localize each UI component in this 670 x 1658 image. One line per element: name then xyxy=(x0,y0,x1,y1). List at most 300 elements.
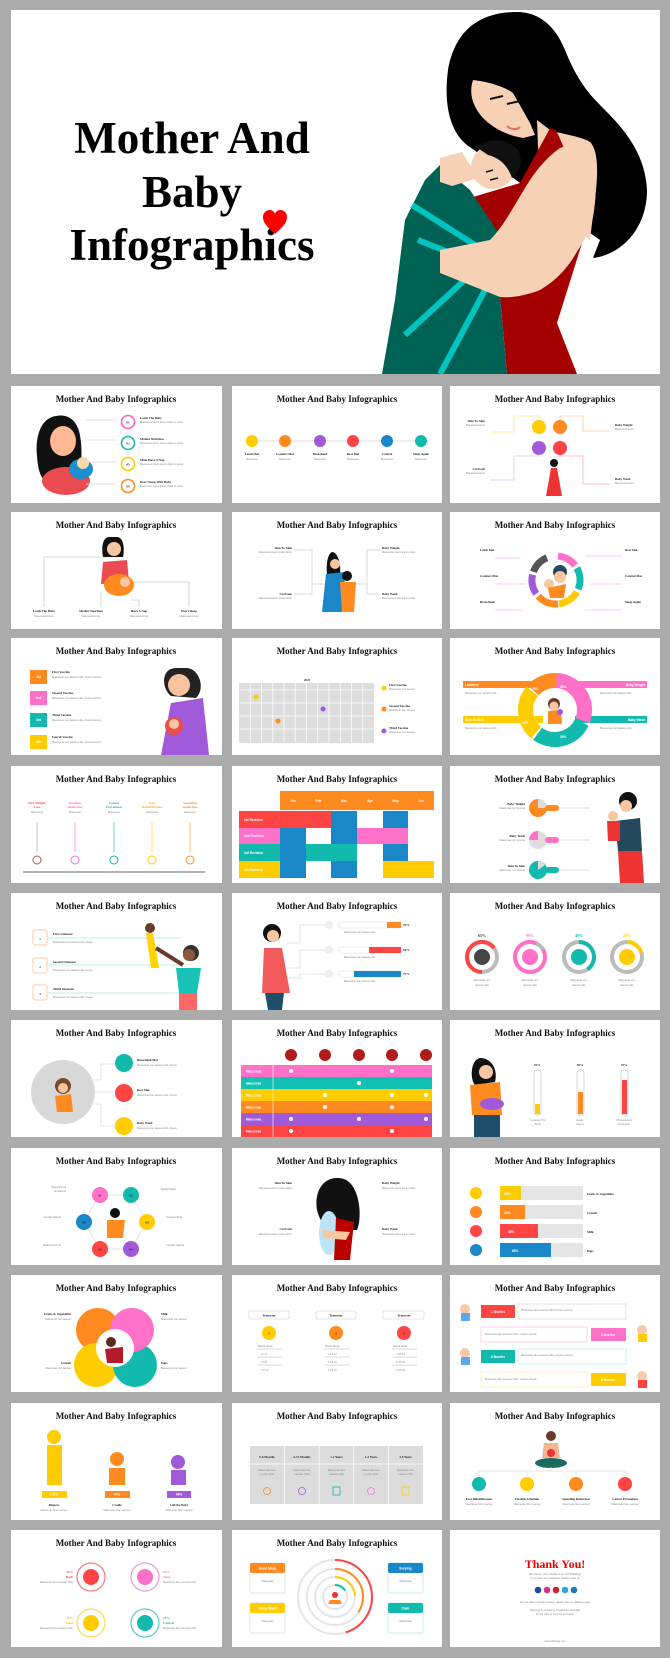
panel: slide 15 ring charts: Maecenas non xyxy=(473,978,491,982)
list blocks xyxy=(30,670,102,749)
panel: slide 28 ring icons: Maecenas Non Laoreet Odio xyxy=(40,1626,74,1630)
bars: Maecenas non laoreet odio. xyxy=(600,691,632,695)
thermometers: Increase The xyxy=(530,1118,546,1122)
list blocks: Maecenas non laoreet odio. Fusce lobortis xyxy=(52,718,102,722)
gantt chart: 2nd Revision xyxy=(244,834,264,838)
column titles: Bonding xyxy=(69,801,81,805)
panel: slide 16 circle with branches xyxy=(11,1020,222,1137)
center icon xyxy=(328,1592,342,1604)
bars: 75% xyxy=(403,972,409,976)
columns: 100% xyxy=(50,1492,58,1496)
gantt chart: Mar xyxy=(341,799,348,803)
side boxes: Maecenas xyxy=(262,1579,274,1583)
side boxes: Good Sleep xyxy=(259,1566,276,1570)
labels: Maecenas non laoreet xyxy=(45,1317,71,1321)
labels: Sleep xyxy=(163,1575,171,1579)
labels: Skin To Skin xyxy=(275,546,292,550)
side boxes: Calm xyxy=(402,1606,410,1610)
column titles: Reduction xyxy=(68,805,83,809)
gantt chart: Jun xyxy=(418,799,424,803)
panel: slide 10 five columns: Maecenas xyxy=(108,810,121,814)
labels: Maecenas lorem ipsum dolor xyxy=(382,1186,415,1190)
gantt chart xyxy=(239,791,434,878)
bars: Maecenas non laoreet odio xyxy=(344,930,376,934)
heading: Mother And Baby Infographics xyxy=(495,1156,616,1166)
timeline circles: Control xyxy=(382,452,392,456)
labels: Maecenas lorem xyxy=(179,614,199,618)
pie items: Baby Weight xyxy=(507,802,526,806)
labels: Cut back xyxy=(280,1227,292,1231)
illustration: woman lifting baby xyxy=(145,923,201,1010)
columns: 2 xyxy=(335,1332,337,1336)
timeline circles: Maecenas xyxy=(279,457,292,461)
numbered list: First trimester xyxy=(53,932,73,936)
connectors xyxy=(44,557,189,607)
bars: Baby Wash xyxy=(628,718,645,722)
table: 0-6 Months xyxy=(259,1455,276,1459)
panel: slide 30 thank you xyxy=(450,1530,660,1647)
labels: Mother Nutrition xyxy=(79,609,103,613)
list items: Don't Sleep With Baby xyxy=(140,480,172,484)
panel: slide 21 horizontal bars xyxy=(450,1148,660,1265)
labels xyxy=(44,1312,187,1370)
heading: thank you: Thank You! xyxy=(525,1557,585,1571)
thermometers: Easily xyxy=(577,1118,584,1122)
stripes: Maecenas xyxy=(246,1070,261,1074)
text block: www.slideegg.com xyxy=(544,1639,566,1643)
labels: Paps xyxy=(161,1361,168,1365)
columns: Trimester xyxy=(329,1314,343,1318)
legend: Second Vaccine xyxy=(389,704,411,708)
numbered list: 2 xyxy=(39,965,41,969)
column titles: Reduction xyxy=(183,805,198,809)
panel: slide 16 circle with branches: Rest Mat xyxy=(137,1088,150,1092)
columns: Maecenas Non Laoreet xyxy=(166,1508,193,1512)
illustration: seated mother xyxy=(535,1431,567,1468)
panel: slide 15 ring charts: Maecenas non xyxy=(570,978,588,982)
labels: Baby Wash xyxy=(382,592,398,596)
panel: slide 15 ring charts: 65% xyxy=(478,933,486,938)
hexagon ring: 04 xyxy=(129,1248,133,1252)
labels: Sleep Again xyxy=(625,600,641,604)
column titles xyxy=(28,801,198,809)
connectors and circles xyxy=(490,416,610,484)
labels: Latch Mat xyxy=(480,548,495,552)
labels xyxy=(66,1570,174,1625)
columns: 45% xyxy=(114,1492,120,1496)
table: 1-2 Years xyxy=(330,1455,344,1459)
labels: Emotional xyxy=(54,1189,66,1193)
icons: social xyxy=(535,1587,577,1593)
heading: Mother And Baby Infographics xyxy=(495,774,616,784)
stripes: Maecenas xyxy=(246,1094,261,1098)
branches xyxy=(479,1467,626,1476)
list items: Maecenas lorem ipsum dolor sit amet xyxy=(140,420,183,424)
legend: Maecenas non laoreet xyxy=(389,687,415,691)
title: Baby xyxy=(142,167,243,217)
list items: 01 xyxy=(126,420,130,424)
panel: slide 15 ring charts: 40% xyxy=(575,933,583,938)
heading: Mother And Baby Infographics xyxy=(277,1538,398,1548)
panel: slide 15 ring charts: laoreet odio xyxy=(620,983,634,987)
panel: slide 24 babies with bars xyxy=(450,1275,660,1392)
panel: main title slide xyxy=(11,10,660,374)
illustration: woman holding baby xyxy=(470,1058,504,1137)
panel: slide 10 five columns: Maecenas xyxy=(146,810,159,814)
heading: Mother And Baby Infographics xyxy=(277,1156,398,1166)
columns: Month Week xyxy=(325,1344,340,1348)
list blocks: Fourth Vaccine xyxy=(52,735,73,739)
thermometers xyxy=(530,1063,632,1126)
list blocks: Maecenas non laoreet odio. Fusce lobortis xyxy=(52,740,102,744)
column titles: Fast xyxy=(149,801,156,805)
panel: slide 15 ring charts: 20% xyxy=(623,933,631,938)
timeline circles: Maecenas xyxy=(415,457,428,461)
labels: 75% xyxy=(163,1616,170,1620)
panel: slide 9 donut with bars xyxy=(450,638,660,755)
panel: slide 7 list with woman xyxy=(11,638,222,755)
bars: Maecenas non laoreet odio. xyxy=(600,726,632,730)
panel: slide 10 five columns: Maecenas xyxy=(31,810,44,814)
table: Maecenas Non xyxy=(362,1468,380,1472)
illustration: mother and child xyxy=(548,698,563,724)
hexagon ring: 01 xyxy=(98,1194,102,1198)
bar chart: 65% xyxy=(512,1249,519,1253)
columns: 8 32-35 xyxy=(396,1360,405,1364)
list blocks: Maecenas non laoreet odio. Fusce lobortis xyxy=(52,696,102,700)
ring chart xyxy=(523,547,589,613)
panel: slide 16 circle with branches: Baby Wash xyxy=(137,1121,153,1125)
labels: Maecenas lorem ipsum dolor xyxy=(382,1232,415,1236)
illustration: woman in purple with baby xyxy=(161,668,209,755)
panel: slide 28 ring icons: Maecenas Non Laoreet Odio xyxy=(163,1626,197,1630)
list items: Maecenas lorem ipsum dolor sit amet xyxy=(140,484,183,488)
heading: Mother And Baby Infographics xyxy=(277,774,398,784)
labels: Easily Digest xyxy=(161,1187,176,1191)
list blocks: 4th xyxy=(36,740,41,744)
panel: slide 9 donut with bars: 30% xyxy=(560,735,567,739)
timeline circles: Comfort Mat xyxy=(276,452,295,456)
thermometers: 25% xyxy=(534,1063,540,1067)
bar chart: Paps xyxy=(587,1249,594,1253)
venn petals xyxy=(74,1308,157,1387)
list items xyxy=(86,416,183,492)
labels: Maecenas lorem xyxy=(81,614,101,618)
heading: Mother And Baby Infographics xyxy=(495,646,616,656)
labels: Maecenas lorem ipsum dolor xyxy=(259,596,292,600)
illustrations: babies xyxy=(460,1304,647,1388)
side boxes: Maecenas xyxy=(400,1619,412,1623)
heading: Mother And Baby Infographics xyxy=(56,1156,177,1166)
columns: Lull the Baby xyxy=(170,1503,189,1507)
hexagon ring: 03 xyxy=(145,1220,149,1224)
gantt chart: Feb xyxy=(316,799,321,803)
heading: Mother And Baby Infographics xyxy=(56,1538,177,1548)
labels: Control xyxy=(163,1621,174,1625)
panel: slide 6 ring xyxy=(450,512,660,629)
labels: Contain Natural xyxy=(43,1215,61,1219)
thermometers: Digest xyxy=(576,1122,584,1126)
bars: Skin To Skin xyxy=(465,718,484,722)
text block: Slideegg is created by PowerPoint template xyxy=(530,1608,581,1612)
panel: slide 28 ring icons xyxy=(11,1530,222,1647)
pie items: Baby Wash xyxy=(510,834,525,838)
panel: slide 9 donut with bars: 25% xyxy=(522,721,529,725)
panel: slide 20 hug with labels xyxy=(232,1148,442,1265)
table: Laoreet Odio xyxy=(260,1472,275,1476)
side boxes: Maecenas xyxy=(262,1619,274,1623)
column titles: Spending xyxy=(183,801,197,805)
gantt chart: May xyxy=(392,799,399,803)
bar chart: Cereals xyxy=(587,1211,598,1215)
panel: slide 15 ring charts: laoreet odio xyxy=(523,983,537,987)
table xyxy=(250,1446,423,1504)
columns xyxy=(41,1430,193,1512)
panel: slide 2 timeline xyxy=(232,386,442,503)
illustration: pregnant woman xyxy=(262,924,290,1010)
panel: slide 27 tree with woman: Spending Reduction xyxy=(562,1497,590,1501)
heading: Mother And Baby Infographics xyxy=(277,1411,398,1421)
heading: Mother And Baby Infographics xyxy=(56,901,177,911)
panel: slide 1 numbered list xyxy=(11,386,222,503)
labels: Maecenas lorem ipsum dolor xyxy=(259,1186,292,1190)
list items: Mom Have A Nap xyxy=(140,458,165,462)
columns: 6 23-27 xyxy=(328,1368,337,1372)
list blocks: First Vaccine xyxy=(52,670,70,674)
labels: 45% xyxy=(66,1570,74,1574)
panel: slide 8 calendar xyxy=(232,638,442,755)
rows: Maecenas Non Laoreet Odio. Fusce Lobortis xyxy=(485,1332,537,1336)
bar chart xyxy=(470,1186,615,1257)
labels: Maecenas lorem xyxy=(34,614,54,618)
list items: Maecenas lorem ipsum dolor sit amet xyxy=(140,441,183,445)
timeline circles: Breastfeed xyxy=(313,452,327,456)
labels: Cereals xyxy=(61,1361,72,1365)
panel: slide 27 tree with woman: Flexible Schedule xyxy=(515,1497,539,1501)
labels: Maecenas lorem xyxy=(129,614,149,618)
heading: Mother And Baby Infographics xyxy=(277,646,398,656)
columns: 5 18-22 xyxy=(328,1360,337,1364)
panel: slide 16 circle with branches: Breastfeed Mat xyxy=(137,1058,159,1062)
rows xyxy=(481,1304,626,1387)
panel: slide 27 tree with woman xyxy=(450,1403,660,1520)
labels: Cut back xyxy=(280,592,292,596)
panel: slide 13 trimesters with woman xyxy=(11,893,222,1010)
columns: Month Week xyxy=(258,1344,273,1348)
heading: Mother And Baby Infographics xyxy=(495,1028,616,1038)
labels xyxy=(259,546,415,600)
panel: slide 26 age table xyxy=(232,1403,442,1520)
list blocks: 1st xyxy=(36,675,42,679)
calendar grid: 2025 xyxy=(304,678,311,682)
gantt chart: Apr xyxy=(367,799,373,803)
numbered list: Maecenas non laoreet odio. Fusce xyxy=(53,968,93,972)
labels: Increase Baby xyxy=(166,1215,183,1219)
panel: slide 28 ring icons: Maecenas Non Laoreet Odio xyxy=(163,1580,197,1584)
table: Laoreet Odio xyxy=(294,1472,310,1476)
panel: slide 5 woman with labels xyxy=(232,512,442,629)
columns: Diapers xyxy=(49,1503,60,1507)
bars: Maecenas non laoreet odio. xyxy=(465,726,497,730)
rows: 1 Months xyxy=(491,1310,505,1314)
list blocks: Second Vaccine xyxy=(52,691,74,695)
panel: slide 10 five columns: Maecenas xyxy=(69,810,82,814)
labels: 55% xyxy=(66,1616,74,1620)
side boxes: Burping xyxy=(399,1566,412,1570)
pie items: Maecenas non laoreet xyxy=(499,868,525,872)
panel: slide 27 tree with woman: Cancer Prevention xyxy=(612,1497,638,1501)
labels xyxy=(466,419,634,485)
heading: Mother And Baby Infographics xyxy=(56,1028,177,1038)
column titles: Cancer xyxy=(109,801,120,805)
thermometers: Physical And xyxy=(617,1118,632,1122)
panel: slide 27 tree with woman: Fast Rehabilitation xyxy=(466,1497,492,1501)
column titles: Fast Weight xyxy=(28,801,47,805)
labels: Rest Mat xyxy=(625,548,638,552)
labels: Control Mat xyxy=(625,574,643,578)
column titles: Loss xyxy=(34,805,41,809)
panel: slide 12 pies with woman xyxy=(450,766,660,883)
labels: Skin To Skin xyxy=(275,1181,292,1185)
table: 6-12 Months xyxy=(293,1455,311,1459)
side boxes: Sleep Mood xyxy=(259,1606,276,1610)
calendar grid xyxy=(239,678,374,743)
gantt chart: 4th Revision xyxy=(244,868,263,872)
labels: Baby Weight xyxy=(382,546,401,550)
hexagon ring xyxy=(76,1187,155,1257)
list blocks: Third Vaccine xyxy=(52,713,72,717)
columns: Maecenas Non Laoreet xyxy=(104,1508,131,1512)
legend xyxy=(382,683,415,734)
bars: Maecenas non laoreet odio xyxy=(344,955,376,959)
numbered list: Second trimester xyxy=(53,960,77,964)
rows: Maecenas Non Laoreet Odio. Fusce Lobortis xyxy=(485,1377,537,1381)
legend: First Vaccine xyxy=(389,683,407,687)
thermometers: Emotional xyxy=(618,1122,630,1126)
rings xyxy=(77,1563,159,1637)
columns: 1 0-4 xyxy=(261,1352,267,1356)
hexagon ring: 06 xyxy=(82,1220,86,1224)
panel: slide 17 striped table xyxy=(232,1020,442,1137)
table: Maecenas Non xyxy=(258,1468,276,1472)
labels: Maecenas lorem xyxy=(615,427,634,431)
columns: Maecenas Non Laoreet xyxy=(41,1508,68,1512)
panel: slide 18 thermometers xyxy=(450,1020,660,1137)
columns: 7 28-31 xyxy=(396,1352,405,1356)
title: Infographics xyxy=(69,220,315,270)
labels: Don't Sleep xyxy=(181,609,197,613)
baseline arrow xyxy=(23,871,205,873)
panel: slide 14 bars with woman xyxy=(232,893,442,1010)
table: 2-3 Years xyxy=(365,1455,378,1459)
columns: 4 14-17 xyxy=(328,1352,337,1356)
panel: slide 16 circle with branches: Maecenas non laoreet odio. Fusce xyxy=(137,1093,177,1097)
bar chart: Fruits & Vegetables xyxy=(587,1192,615,1196)
side boxes: Maecenas xyxy=(400,1579,412,1583)
panel: slide 27 tree with woman: Maecenas Non Laoreet xyxy=(612,1502,639,1506)
labels: Bath xyxy=(66,1575,73,1579)
panel: slide 27 tree with woman: Maecenas Non Laoreet xyxy=(563,1502,590,1506)
numbered list: 3 xyxy=(39,992,41,996)
stripes: Maecenas xyxy=(246,1130,261,1134)
title xyxy=(69,113,315,270)
labels xyxy=(259,1181,415,1236)
timeline circles xyxy=(245,435,429,461)
labels xyxy=(480,548,643,610)
labels: Physical And xyxy=(51,1185,67,1189)
labels: Cut back xyxy=(472,467,485,471)
header icons xyxy=(285,1049,432,1061)
legend: Third Vaccine xyxy=(389,726,409,730)
labels xyxy=(43,1185,184,1247)
labels: Maecenas lorem ipsum dolor xyxy=(259,1232,292,1236)
rows: 9 Months xyxy=(601,1378,615,1382)
columns: 40% xyxy=(176,1492,182,1496)
heading: Mother And Baby Infographics xyxy=(277,394,398,404)
numbered list: Maecenas non laoreet odio. Fusce xyxy=(53,940,93,944)
illustration: woman in blue with child xyxy=(322,552,356,612)
panel: slide 4 tree xyxy=(11,512,222,629)
thermometers: 75% xyxy=(621,1063,627,1067)
numbered list: Third trimester xyxy=(53,987,75,991)
illustration: mother holding baby xyxy=(382,12,647,374)
illustration: mother with orange baby wrap xyxy=(101,537,134,596)
bar chart: Milk xyxy=(587,1230,594,1234)
list items: 03 xyxy=(126,462,130,466)
labels: Maecenas non laoreet xyxy=(161,1366,187,1370)
columns: 3 9-13 xyxy=(261,1368,269,1372)
table: Laoreet Odio xyxy=(329,1472,345,1476)
panel: slide 19 hexagon xyxy=(11,1148,222,1265)
rows: 3 Months xyxy=(601,1333,615,1337)
labels: Latch The Baby xyxy=(33,609,55,613)
timeline circles: Latch Mat xyxy=(245,452,260,456)
illustration: mother hugging child xyxy=(316,1178,360,1260)
panel: slide 15 ring charts: Maecenas non xyxy=(521,978,539,982)
panel: slide 27 tree with woman: Maecenas Non Laoreet xyxy=(466,1502,493,1506)
labels: Maecenas lorem ipsum dolor xyxy=(259,550,292,554)
labels: Maecenas lorem xyxy=(466,471,485,475)
heading: Mother And Baby Infographics xyxy=(495,1411,616,1421)
pie items xyxy=(499,799,590,879)
labels: Maecenas non laoreet xyxy=(161,1317,187,1321)
text block xyxy=(520,1572,591,1643)
labels: Skin To Skin xyxy=(468,419,485,423)
columns: 1 xyxy=(268,1332,270,1336)
panel: slide 22 venn xyxy=(11,1275,222,1392)
text block: If you have any questions, please reach us xyxy=(530,1576,580,1580)
gantt chart: Jan xyxy=(290,799,296,803)
donut chart xyxy=(513,668,597,752)
timeline circles: Sleep Again xyxy=(413,452,429,456)
central circle xyxy=(31,1060,95,1124)
table: Laoreet Odio xyxy=(398,1472,414,1476)
heading: Mother And Baby Infographics xyxy=(495,520,616,530)
side boxes xyxy=(250,1563,423,1633)
labels: Baby Weight xyxy=(382,1181,401,1185)
panel: slide 25 column chart xyxy=(11,1403,222,1520)
columns xyxy=(249,1311,424,1372)
panel: slide 11 gantt xyxy=(232,766,442,883)
labels: Milk xyxy=(161,1312,168,1316)
pie items: Skin To Skin xyxy=(508,864,525,868)
gantt chart: 3rd Revision xyxy=(244,851,263,855)
labels: Maecenas lorem ipsum dolor xyxy=(382,550,415,554)
icon: heart xyxy=(263,210,287,234)
column titles: Prevention xyxy=(106,805,122,809)
pie items: Maecenas non laoreet xyxy=(499,838,525,842)
labels: 65% xyxy=(163,1570,170,1574)
